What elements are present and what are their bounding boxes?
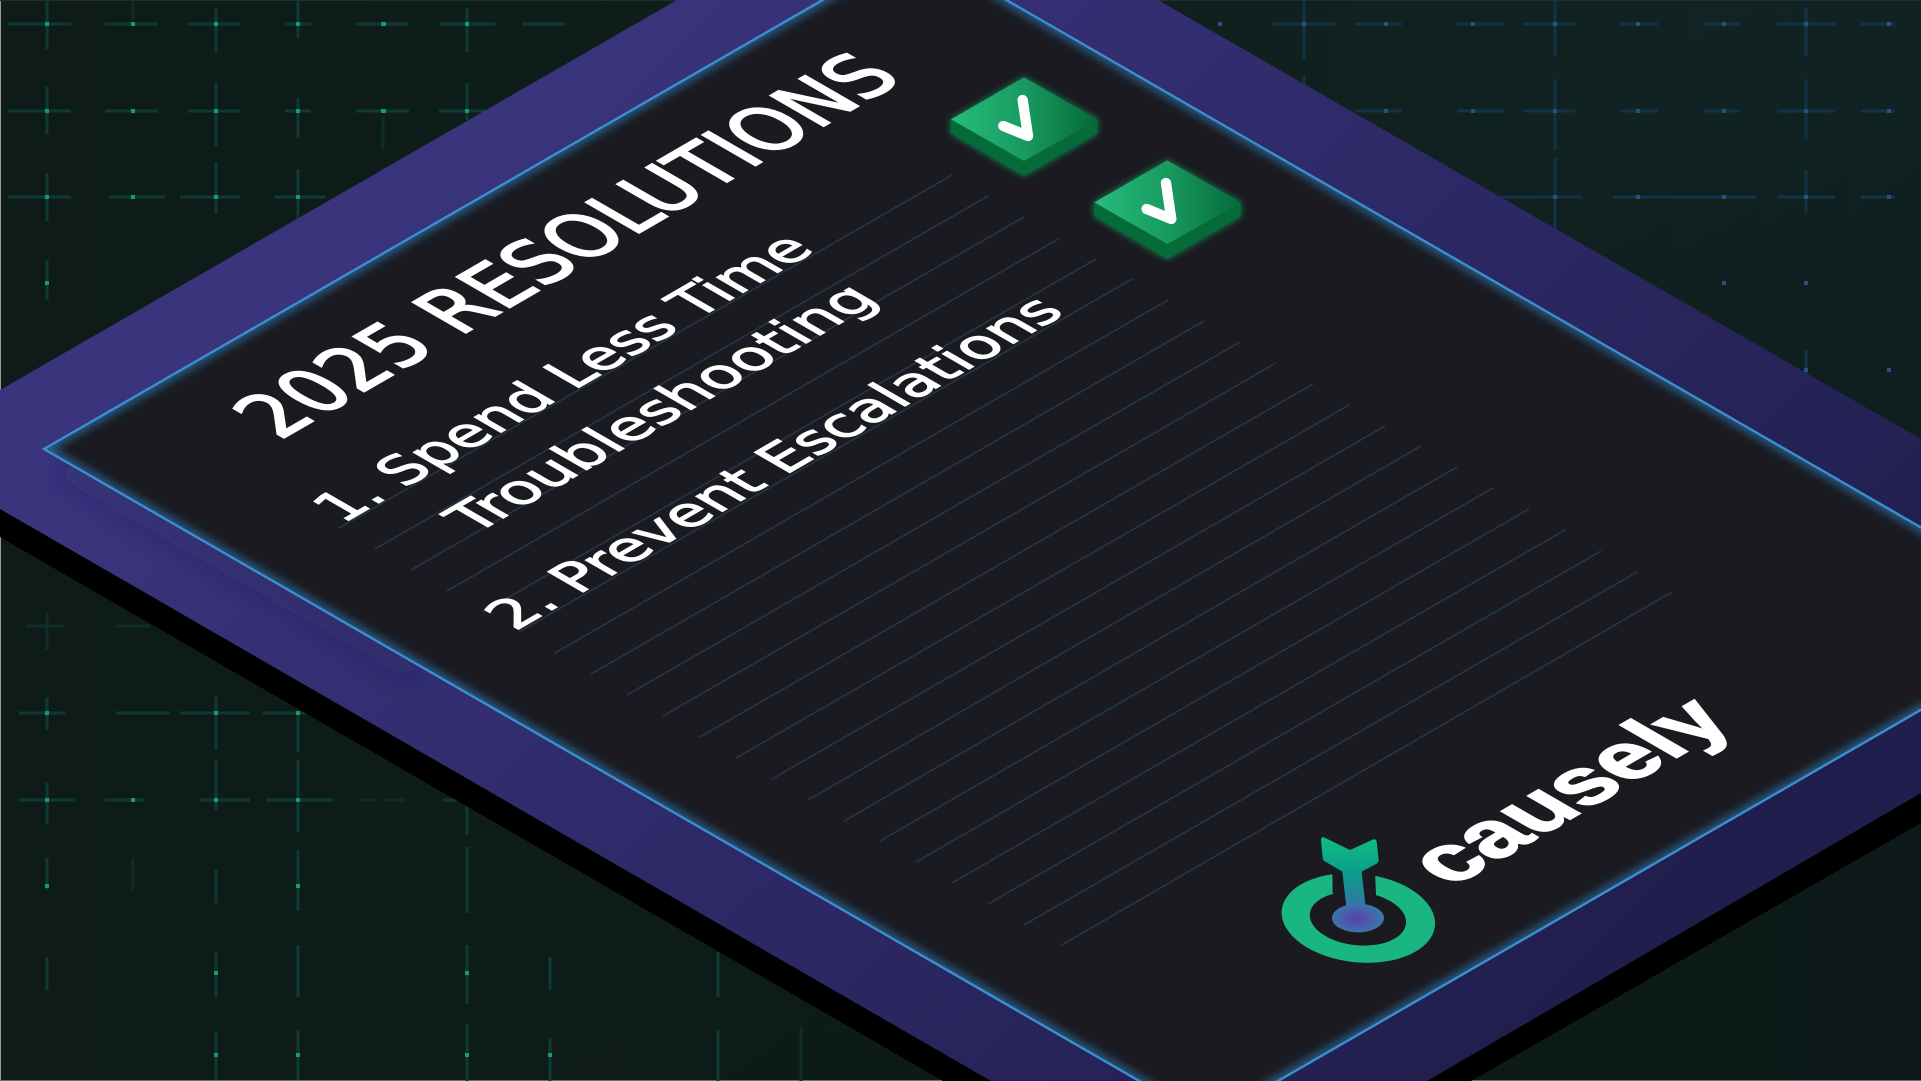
icon: green check tile 2 [1094, 160, 1241, 259]
logo: causely target icon [1277, 837, 1440, 970]
background grid: green crosses [8, 0, 801, 1081]
text block: resolutions list [164, 40, 1200, 639]
list item 2: 2. Prevent Escalations [471, 287, 1079, 639]
background grid: blue crosses [1218, 0, 1895, 380]
logo: causely wordmark: causely [1383, 683, 1753, 898]
list item 1 continued: Troubleshooting [430, 275, 892, 542]
icon: green check tile 1 [951, 77, 1097, 176]
list item 1: 1. Spend Less Time [298, 225, 828, 531]
ruled lines [339, 175, 1672, 946]
board shadow [0, 450, 1921, 1081]
